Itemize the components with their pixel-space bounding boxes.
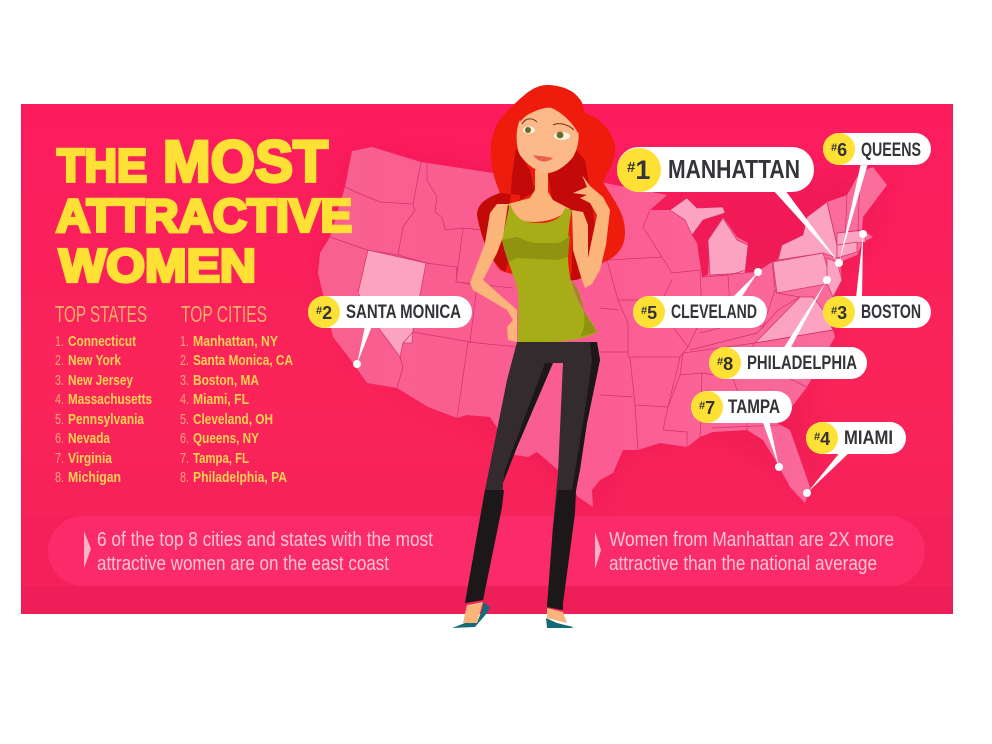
- callout: #1 Manhattan: 1: [635, 155, 650, 185]
- highlighted states: [358, 198, 866, 357]
- callout: #6 Queens: [823, 133, 931, 263]
- callout: #1 Manhattan: [617, 147, 843, 267]
- callout: #2 Santa Monica: 2: [322, 303, 332, 323]
- text block: top cities: Philadelphia, PA: [193, 469, 287, 486]
- callout: #6 Queens: 6: [837, 140, 847, 160]
- text block: top states: 3.: [55, 372, 64, 389]
- callout: #8 Philadelphia: 8: [723, 354, 733, 374]
- panel: pink background: [21, 104, 953, 614]
- state borders: [330, 162, 863, 450]
- callout: east coast fact: attractive women are on the east coast: [97, 553, 389, 575]
- illustration: woman: [452, 85, 625, 628]
- pants: [465, 342, 600, 610]
- title: [56, 130, 352, 292]
- title: THE: [57, 140, 147, 192]
- text block: top states: 1.: [55, 333, 64, 350]
- callout: #2 Santa Monica: [308, 296, 472, 368]
- callout: #7 Tampa: #: [699, 400, 705, 412]
- text block: top states: TOP STATES: [55, 301, 147, 327]
- text block: top states: 8.: [55, 469, 64, 486]
- text block: top states: New Jersey: [68, 372, 134, 389]
- text block: top cities: 3.: [180, 372, 189, 389]
- left arm: [470, 204, 517, 342]
- text block: top states: Pennsylvania: [68, 411, 145, 428]
- text block: top cities: 8.: [180, 469, 189, 486]
- text block: top states: Michigan: [68, 469, 121, 486]
- callout: #2 Santa Monica: #: [316, 305, 322, 317]
- text block: top cities: Tampa, FL: [193, 450, 249, 467]
- text block: top cities: [180, 301, 293, 486]
- eyes: [522, 119, 574, 140]
- text block: top states: 4.: [55, 391, 64, 408]
- callout: #5 Cleveland: [633, 268, 767, 328]
- text block: top states: 2.: [55, 352, 64, 369]
- text block: top states: Connecticut: [68, 333, 136, 350]
- chart: map of the United States: [318, 147, 887, 507]
- callout: #7 Tampa: 7: [705, 398, 715, 418]
- neck and chest: [508, 170, 570, 222]
- callout: #4 Miami: [803, 422, 906, 497]
- title: WOMEN: [59, 240, 256, 292]
- text block: top cities: TOP CITIES: [181, 301, 267, 327]
- callout: #4 Miami: 4: [820, 429, 830, 449]
- callout: #6 Queens: #: [831, 142, 837, 154]
- callout: #5 Cleveland: 5: [647, 303, 657, 323]
- callout: east coast fact: 6 of the top 8 cities and states with the most: [97, 529, 433, 551]
- callout: #5 Cleveland: CLEVELAND: [671, 302, 757, 323]
- top: [502, 203, 597, 343]
- text block: top states: New York: [68, 352, 122, 369]
- text block: top cities: 7.: [180, 450, 189, 467]
- text block: top states: Virginia: [68, 450, 113, 467]
- text block: top cities: 1.: [180, 333, 189, 350]
- callout: east coast fact: [84, 529, 433, 575]
- shoes: [463, 602, 567, 623]
- title: MOST: [163, 130, 328, 194]
- callout: #1 Manhattan: MANHATTAN: [668, 154, 800, 184]
- text block: top cities: Manhattan, NY: [193, 333, 278, 350]
- callout: Manhattan fact: [595, 529, 894, 575]
- right arm and hand: [572, 175, 610, 288]
- hair front lock: [520, 100, 580, 133]
- text block: top states: 6.: [55, 430, 64, 447]
- text block: top states: Nevada: [68, 430, 111, 447]
- callout: #8 Philadelphia: #: [717, 356, 723, 368]
- text block: top cities: Queens, NY: [193, 430, 259, 447]
- text block: top states: 7.: [55, 450, 64, 467]
- callout: #4 Miami: #: [814, 431, 820, 443]
- callout: #7 Tampa: TAMPA: [728, 397, 780, 418]
- text block: top cities: Santa Monica, CA: [193, 352, 293, 369]
- text block: top cities: 6.: [180, 430, 189, 447]
- text block: top states: Massachusetts: [68, 391, 152, 408]
- callout: #3 Boston: [823, 230, 931, 328]
- callout: #6 Queens: QUEENS: [861, 140, 921, 161]
- text block: top cities: 4.: [180, 391, 189, 408]
- callout: Manhattan fact: Women from Manhattan are 2X more: [609, 529, 894, 551]
- callout: #4 Miami: MIAMI: [844, 428, 893, 449]
- callout: #8 Philadelphia: PHILADELPHIA: [747, 353, 857, 374]
- hair back: [477, 85, 625, 280]
- callout: #2 Santa Monica: SANTA MONICA: [346, 302, 461, 323]
- callout: #7 Tampa: [691, 391, 792, 471]
- callout: #8 Philadelphia: [709, 276, 867, 379]
- callout: #3 Boston: #: [831, 305, 837, 317]
- callout: #5 Cleveland: #: [641, 305, 647, 317]
- text block: top cities: Boston, MA: [193, 372, 259, 389]
- title: ATTRACTIVE: [56, 190, 352, 242]
- text block: top states: [55, 301, 152, 486]
- text block: top cities: 5.: [180, 411, 189, 428]
- callout: #3 Boston: BOSTON: [861, 302, 921, 323]
- mouth: [533, 155, 553, 161]
- face: [517, 108, 579, 173]
- text block: top cities: Miami, FL: [193, 391, 249, 408]
- text block: top states: 5.: [55, 411, 64, 428]
- callout: Manhattan fact: attractive than the national average: [609, 553, 877, 575]
- callout: #3 Boston: 3: [837, 303, 847, 323]
- text block: top cities: 2.: [180, 352, 189, 369]
- callout: #1 Manhattan: #: [627, 159, 636, 176]
- text block: top cities: Cleveland, OH: [193, 411, 273, 428]
